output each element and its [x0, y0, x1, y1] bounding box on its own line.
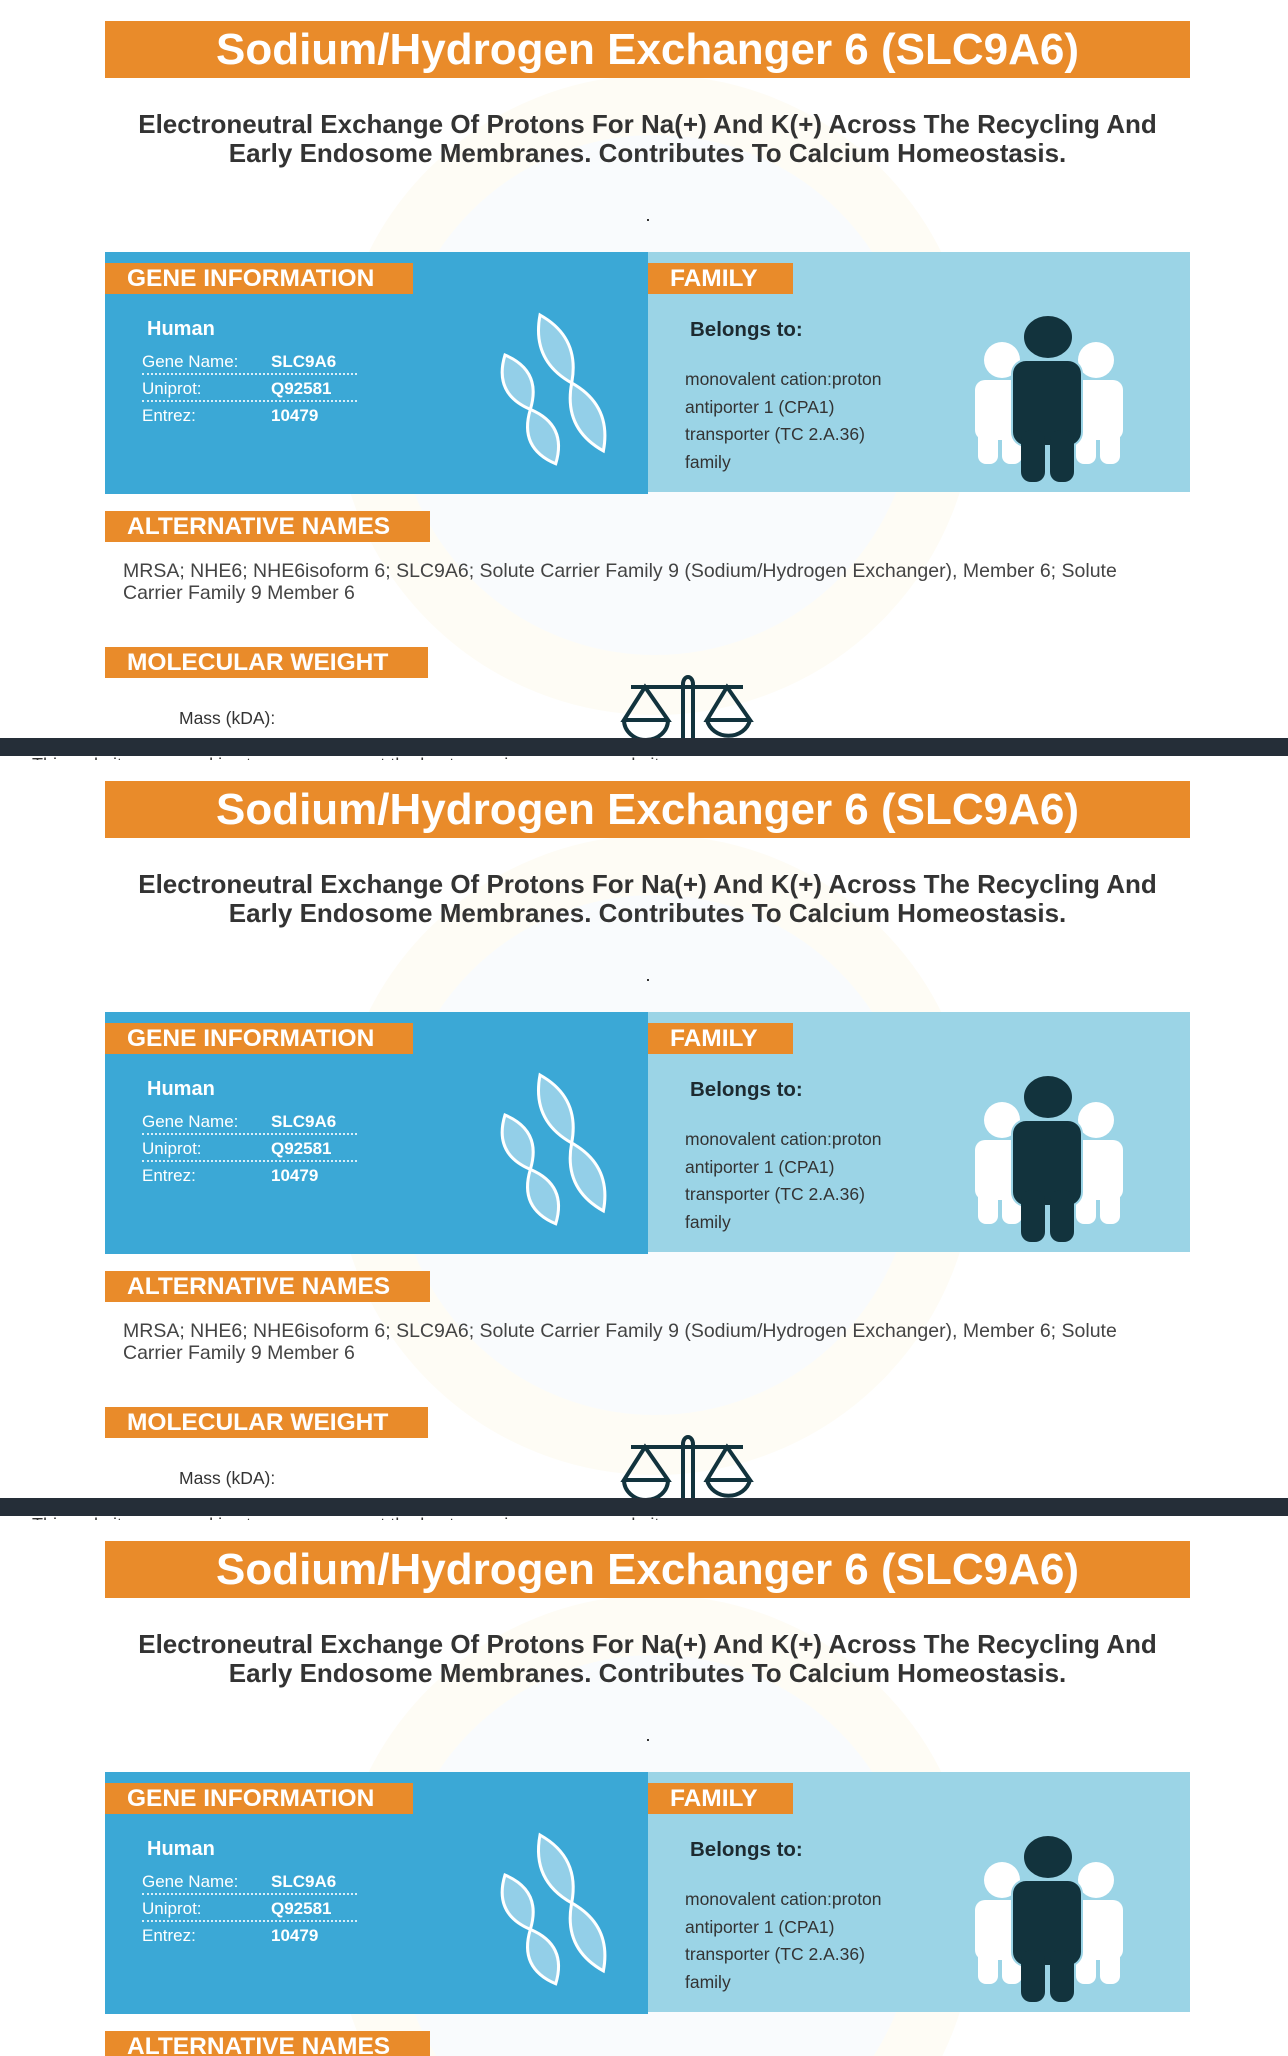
gene rows: Q92581: [271, 1139, 332, 1158]
title: [105, 781, 1190, 838]
title: [105, 21, 1190, 78]
subtitle: Early Endosome Membranes. Contributes To Calcium Homeostasis.: [229, 138, 1066, 168]
gene rows: 10479: [271, 1926, 318, 1945]
text: alternative names: MRSA; NHE6; NHE6isoform 6; SLC9A6; Solute Carrier Family 9 (Sodium/Hydrogen Exchanger), Member 6; Solute Carrier Family 9 Member 6: [123, 1320, 1117, 1364]
text: family: [685, 369, 882, 472]
text: family: transporter (TC 2.A.36): [685, 1944, 865, 1964]
gene rows: Q92581: [271, 379, 332, 398]
text: family: transporter (TC 2.A.36): [685, 1184, 865, 1204]
gene rows: Entrez:: [142, 1926, 196, 1945]
gene rows: Uniprot:: [142, 1139, 202, 1158]
subtitle: [138, 1629, 1157, 1688]
heading: gene information: GENE INFORMATION: [127, 265, 374, 292]
section 2: [0, 760, 1288, 1520]
gene rows: SLC9A6: [271, 352, 336, 371]
heading: gene information: [105, 263, 413, 294]
text: family: family: [685, 1212, 731, 1232]
subtitle: Electroneutral Exchange Of Protons For Na(+) And K(+) Across The Recycling And: [138, 869, 1157, 899]
text: family: antiporter 1 (CPA1): [685, 396, 834, 416]
panel: gene information: [105, 1772, 648, 2014]
text: belongs to: Belongs to:: [690, 1838, 803, 1861]
icon: dna: [500, 312, 606, 466]
gene rows: Gene Name:: [142, 1112, 238, 1131]
heading: molecular weight: MOLECULAR WEIGHT: [127, 649, 388, 676]
text: family: transporter (TC 2.A.36): [685, 424, 865, 444]
panel: family: [648, 1012, 1190, 1252]
subtitle: Early Endosome Membranes. Contributes To Calcium Homeostasis.: [229, 898, 1066, 928]
text: family: monovalent cation:proton: [685, 1129, 882, 1149]
icon: people: [975, 1076, 1123, 1242]
gene rows: Entrez:: [142, 1166, 196, 1185]
heading: family: FAMILY: [670, 1025, 758, 1052]
icon: scales: [620, 675, 754, 738]
heading: family: FAMILY: [670, 265, 758, 292]
text: family: monovalent cation:proton: [685, 369, 882, 389]
text: belongs to: Belongs to:: [690, 1078, 803, 1101]
gene rows: [142, 1872, 357, 1945]
title: [105, 1541, 1190, 1598]
gene rows: Gene Name:: [142, 1872, 238, 1891]
gene rows: [142, 1112, 357, 1185]
gene rows: Uniprot:: [142, 379, 202, 398]
text: family: antiporter 1 (CPA1): [685, 1916, 834, 1936]
heading: family: [648, 1783, 793, 1814]
subtitle: Early Endosome Membranes. Contributes To Calcium Homeostasis.: [229, 1658, 1066, 1688]
text: human: Human: [147, 1078, 215, 1100]
subtitle: Electroneutral Exchange Of Protons For Na(+) And K(+) Across The Recycling And: [138, 1629, 1157, 1659]
text: human: Human: [147, 1838, 215, 1860]
text: family: antiporter 1 (CPA1): [685, 1156, 834, 1176]
icon: people: [975, 316, 1123, 482]
gene rows: SLC9A6: [271, 1872, 336, 1891]
gene rows: SLC9A6: [271, 1112, 336, 1131]
text: family: [685, 1129, 882, 1232]
icon: people: [975, 1836, 1123, 2002]
text: family: family: [685, 1972, 731, 1992]
text: alternative names: MRSA; NHE6; NHE6isoform 6; SLC9A6; Solute Carrier Family 9 (Sodium/Hydrogen Exchanger), Member 6; Solute Carrier Family 9 Member 6: [123, 560, 1117, 604]
text: mass: Mass (kDA):: [179, 708, 275, 728]
heading: family: [648, 263, 793, 294]
heading: molecular weight: MOLECULAR WEIGHT: [127, 1409, 388, 1436]
gene rows: Uniprot:: [142, 1899, 202, 1918]
subtitle: [138, 109, 1157, 168]
cookie band: [0, 738, 1288, 756]
text: mass: Mass (kDA):: [179, 1468, 275, 1488]
heading: family: [648, 1023, 793, 1054]
gene rows: Entrez:: [142, 406, 196, 425]
title: Sodium/Hydrogen Exchanger 6 (SLC9A6): [216, 785, 1079, 834]
panel: gene information: [105, 1012, 648, 1254]
subtitle: [138, 869, 1157, 928]
text: family: [685, 1889, 882, 1992]
icon: scales: [620, 1435, 754, 1498]
heading: alternative names: ALTERNATIVE NAMES: [127, 1273, 390, 1300]
heading: family: FAMILY: [670, 1785, 758, 1812]
panel: family: [648, 252, 1190, 492]
text: human: Human: [147, 318, 215, 340]
heading: alternative names: ALTERNATIVE NAMES: [127, 513, 390, 540]
section 3: [0, 1520, 1288, 2056]
text: belongs to: Belongs to:: [690, 318, 803, 341]
text: family: family: [685, 452, 731, 472]
icon: dna: [500, 1072, 606, 1226]
heading: gene information: GENE INFORMATION: [127, 1785, 374, 1812]
heading: gene information: [105, 1783, 413, 1814]
section 1: [0, 0, 1288, 760]
icon: dna: [500, 1832, 606, 1986]
heading: gene information: GENE INFORMATION: [127, 1025, 374, 1052]
gene rows: 10479: [271, 406, 318, 425]
heading: gene information: [105, 1023, 413, 1054]
subtitle: Electroneutral Exchange Of Protons For Na(+) And K(+) Across The Recycling And: [138, 109, 1157, 139]
text: family: monovalent cation:proton: [685, 1889, 882, 1909]
cookie band: [0, 1498, 1288, 1516]
gene rows: [142, 352, 357, 425]
gene rows: Gene Name:: [142, 352, 238, 371]
panel: gene information: [105, 252, 648, 494]
panel: family: [648, 1772, 1190, 2012]
title: Sodium/Hydrogen Exchanger 6 (SLC9A6): [216, 1545, 1079, 1594]
gene rows: Q92581: [271, 1899, 332, 1918]
gene rows: 10479: [271, 1166, 318, 1185]
title: Sodium/Hydrogen Exchanger 6 (SLC9A6): [216, 25, 1079, 74]
